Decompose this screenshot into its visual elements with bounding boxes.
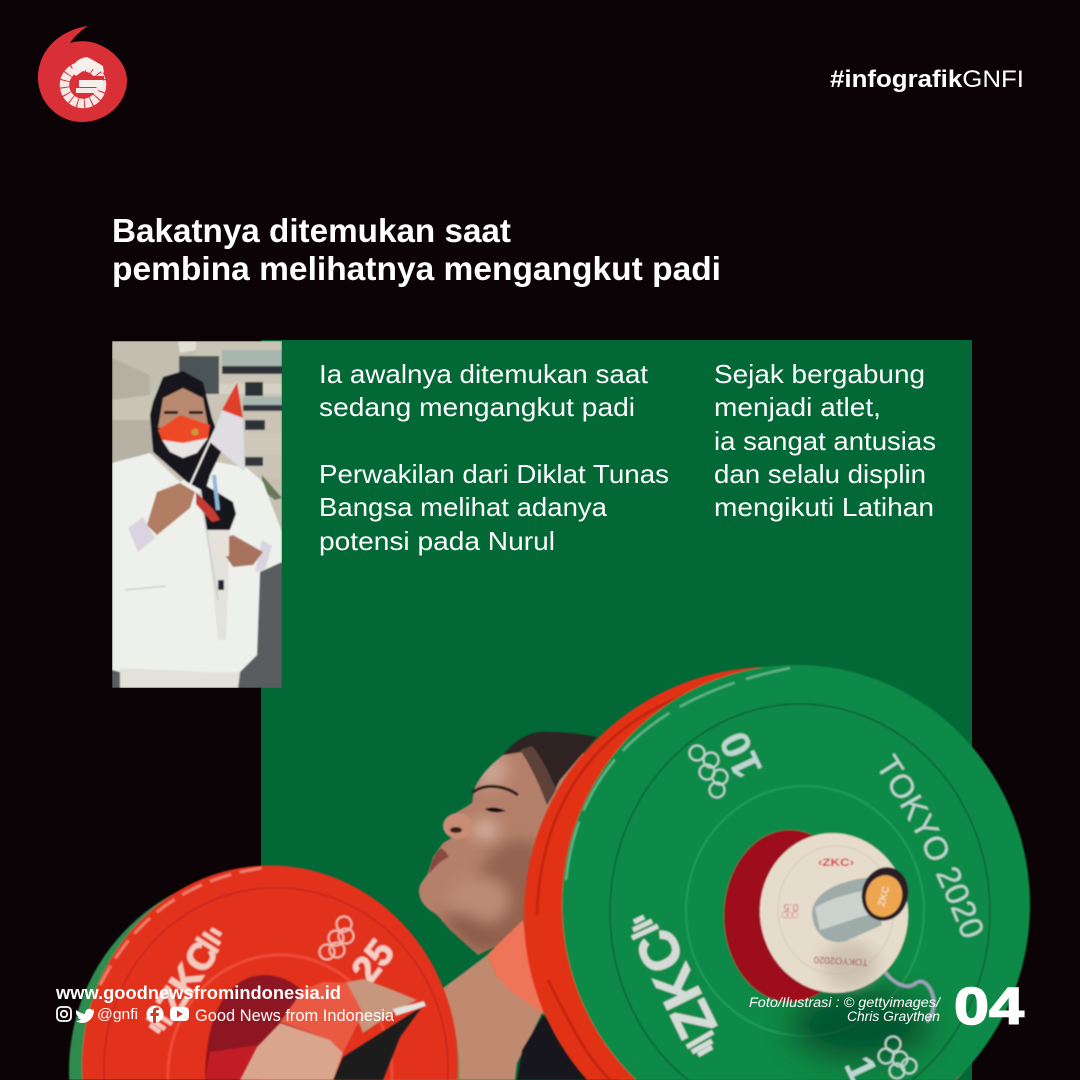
text block: right column: dan selalu displin: [714, 459, 926, 489]
logo: GNFI red swirl: [38, 26, 127, 122]
mask: [162, 438, 208, 458]
jacket: [112, 453, 282, 688]
small plate shading: [822, 941, 878, 989]
handle: @gnfi: [97, 1006, 138, 1023]
title: pembina melihatnya mengangkut padi: [112, 250, 721, 287]
icon: youtube: [170, 1007, 189, 1021]
text block: left column: sedang mengangkut padi: [319, 392, 635, 422]
plate label: ZKC: ZKC: [623, 920, 729, 1049]
text block: right column: menjadi atlet,: [714, 392, 881, 422]
text block: left column: potensi pada Nurul: [319, 526, 555, 556]
hair: [503, 732, 597, 805]
small plate label: TOKYO2020: TOKYO2020: [814, 954, 868, 967]
hook: [885, 972, 934, 1022]
barbell sleeve: [812, 877, 882, 942]
olympic rings top: [690, 746, 728, 798]
photo: athlete with flag: [112, 341, 282, 688]
icon: facebook: [146, 1006, 164, 1023]
hand: [343, 979, 417, 1033]
hub lower: [205, 1042, 330, 1080]
channel name: Good News from Indonesia: [195, 1007, 395, 1025]
website: www.goodnewsfromindonesia.id: [55, 983, 341, 1003]
small plate label: ZKC: ‹ZKC›: [818, 857, 854, 869]
rim glints: [100, 868, 262, 985]
photo credit: Chris Graythen: [847, 1009, 940, 1024]
title: Bakatnya ditemukan saat: [112, 212, 511, 249]
hands: [147, 483, 195, 535]
text block: left column: Bangsa melihat adanya: [319, 492, 608, 522]
text block: left column: Ia awalnya ditemukan saat: [319, 359, 649, 389]
text block: right column: ia sangat antusias: [714, 426, 936, 456]
inner ring: [686, 786, 924, 1036]
text block: right column: Sejak bergabung: [714, 359, 925, 389]
body: [378, 955, 542, 1080]
face: [418, 751, 584, 956]
small plate: [750, 823, 918, 1003]
singlet: [517, 1015, 620, 1080]
cuff: [128, 517, 155, 552]
hub shadow: [790, 989, 930, 1061]
small plate label: 0.5: 0.5: [783, 901, 799, 913]
plate label: TOKYO 2020: TOKYO 2020: [878, 752, 984, 938]
face: [158, 388, 208, 428]
text block: right column: mengikuti Latihan: [714, 492, 934, 522]
singlet: [333, 1000, 427, 1080]
photo credit: [749, 995, 941, 1024]
title: [112, 212, 721, 287]
hub dark red: [724, 830, 856, 1002]
text block: left column: Perwakilan dari Diklat Tunas: [319, 459, 669, 489]
social row: [57, 1006, 395, 1025]
lips: [429, 848, 449, 874]
eye: [485, 808, 506, 812]
illustration: red plate with green rim: [69, 865, 459, 1080]
plate label: ZKC: ZKC: [149, 934, 227, 1023]
barbell end cap: [856, 862, 914, 926]
rim highlight: [566, 668, 790, 880]
small plate rings: [782, 912, 798, 918]
text block: left column: [319, 359, 669, 556]
olympic rings bottom: [878, 1036, 916, 1078]
eyebrow: [472, 786, 518, 795]
plate bar marks: [632, 917, 713, 1055]
plate label: top 10: 10: [710, 725, 771, 785]
hub: [205, 975, 332, 1080]
illustration: arm and hand: [240, 979, 427, 1080]
illustration: athlete: [378, 732, 620, 1080]
photo credit: Foto/Ilustrasi : © gettyimages/: [749, 995, 941, 1010]
text block: right column: [714, 359, 936, 522]
icon: twitter: [76, 1009, 94, 1023]
hashtag: #infografik GNFI: [830, 66, 1024, 93]
olympic rings: [320, 916, 354, 960]
plate label: 25: 25: [344, 932, 403, 991]
plate bar marks: [147, 929, 221, 1032]
bar: [393, 1001, 426, 1016]
wrist wrap: [280, 982, 363, 1053]
forearm: [240, 1023, 343, 1080]
page number: 04: [954, 978, 1024, 1036]
shirt sleeve: [487, 920, 545, 1015]
end cap label: ZKC: [876, 885, 892, 908]
nose: [443, 813, 473, 839]
flag: [190, 382, 237, 485]
hijab: [150, 371, 223, 492]
dark ring: [610, 704, 990, 1080]
icon: instagram: [57, 1007, 71, 1021]
panel: green text panel: [261, 340, 972, 1080]
illustration: green plate with red rim: [523, 664, 1031, 1080]
